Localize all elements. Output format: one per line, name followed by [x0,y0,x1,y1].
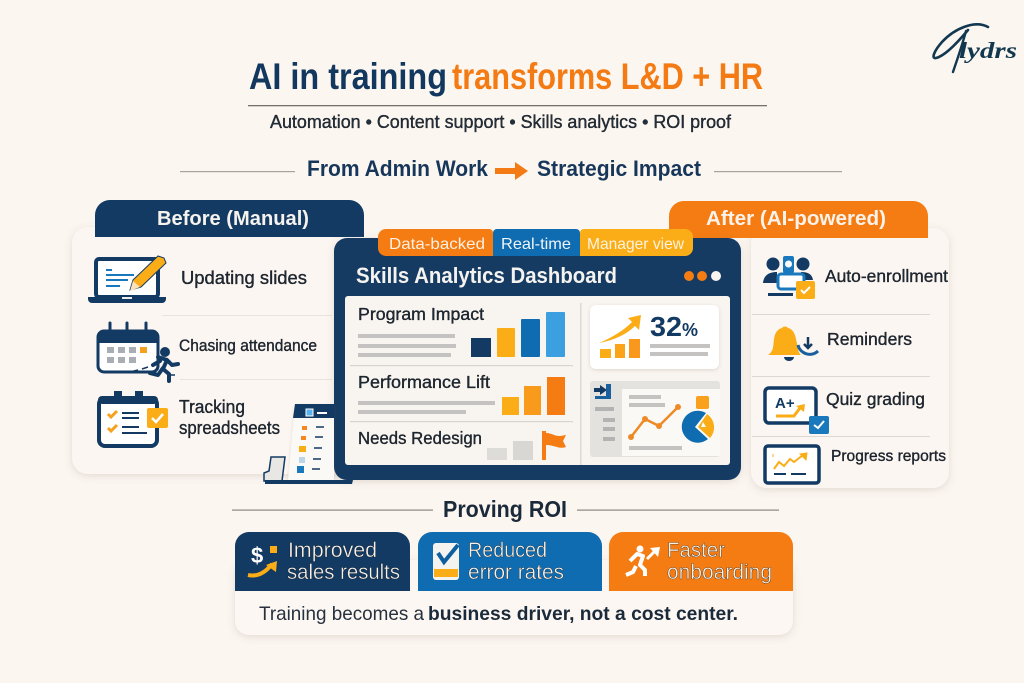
card: 32% uplift [590,305,719,369]
panel: after (ai-powered) [669,201,949,488]
dashboard body [345,296,730,465]
icon: quiz grade: A+ [775,395,795,412]
after header [669,201,928,238]
icon: laptop with pencil [88,256,166,303]
logo: Glydrs signature: lydrs [959,38,1017,63]
row: program impact [358,304,565,357]
tab: real-time: Real-time [501,236,571,253]
text: tracking spreadsheets: Tracking [179,396,245,417]
row: performance lift: Performance Lift [358,372,490,392]
card: improved sales results: sales results [287,561,400,584]
title: AI in training [249,56,447,97]
tab: manager view [580,229,693,256]
card: report preview [590,381,720,457]
icon: tracking checklist [98,391,168,446]
card: faster onboarding [609,532,793,591]
takeaway text: business driver, not a cost center. [428,603,738,625]
tab: manager view: Manager view [587,236,684,253]
row: needs redesign [358,428,566,460]
before header: Before (Manual) [157,207,309,230]
panel: roi outcomes [235,532,793,635]
text: tracking spreadsheets [179,396,280,438]
before header [95,200,364,237]
text: updating slides: Updating slides [181,267,307,288]
card: improved sales results: Improved [288,539,377,562]
text: quiz grading: Quiz grading [826,389,925,409]
panel: before (manual) [72,200,364,474]
card: faster onboarding: onboarding [667,561,772,584]
tab: data-backed: Data-backed [389,236,485,253]
icon: people auto-enrollment [763,256,815,299]
tab: real-time [493,229,580,256]
card: improved sales results [235,532,410,591]
card: reduced error rates [418,532,602,591]
logo: Glydrs signature [934,24,1017,72]
row: performance lift [358,372,565,415]
text: reminders: Reminders [827,329,912,349]
text: tracking spreadsheets: spreadsheets [179,417,280,438]
icon: quiz grade [765,388,829,434]
takeaway text: Training becomes a [259,603,424,625]
icon: calendar with runner [97,323,178,381]
card: faster onboarding: Faster [667,539,725,562]
card: 32% uplift: 32 [650,311,682,342]
text: progress reports: Progress reports [831,448,946,465]
title [249,56,763,97]
card: reduced error rates: error rates [468,561,564,584]
row: program impact: Program Impact [358,304,484,324]
takeaway text [259,603,738,625]
panel: skills analytics dashboard [334,229,741,480]
section heading: from admin work to strategic impact: Strategic Impact [537,156,701,181]
row: needs redesign: Needs Redesign [358,428,482,448]
dashboard title: Skills Analytics Dashboard [356,263,617,288]
window dots [684,271,721,281]
subtitle: Automation • Content support • Skills analytics • ROI proof [270,111,732,132]
icon: progress report [765,446,819,483]
section heading: from admin work to strategic impact: From Admin Work [307,156,488,181]
icon: clipboard checklist overlapping panels [264,404,353,484]
tab: data-backed [378,229,493,256]
card: 32% uplift: % [682,320,698,340]
icon: bell reminder [768,326,818,361]
title: transforms L&D + HR [452,56,763,97]
text: chasing attendance: Chasing attendance [179,336,317,355]
section heading: from admin work to strategic impact [180,156,842,181]
section heading: proving roi: Proving ROI [443,496,567,522]
card: improved sales results: $ [251,543,263,568]
text: auto-enrollment: Auto-enrollment [825,266,948,286]
after header: After (AI-powered) [706,207,886,230]
card: reduced error rates: Reduced [468,539,547,562]
